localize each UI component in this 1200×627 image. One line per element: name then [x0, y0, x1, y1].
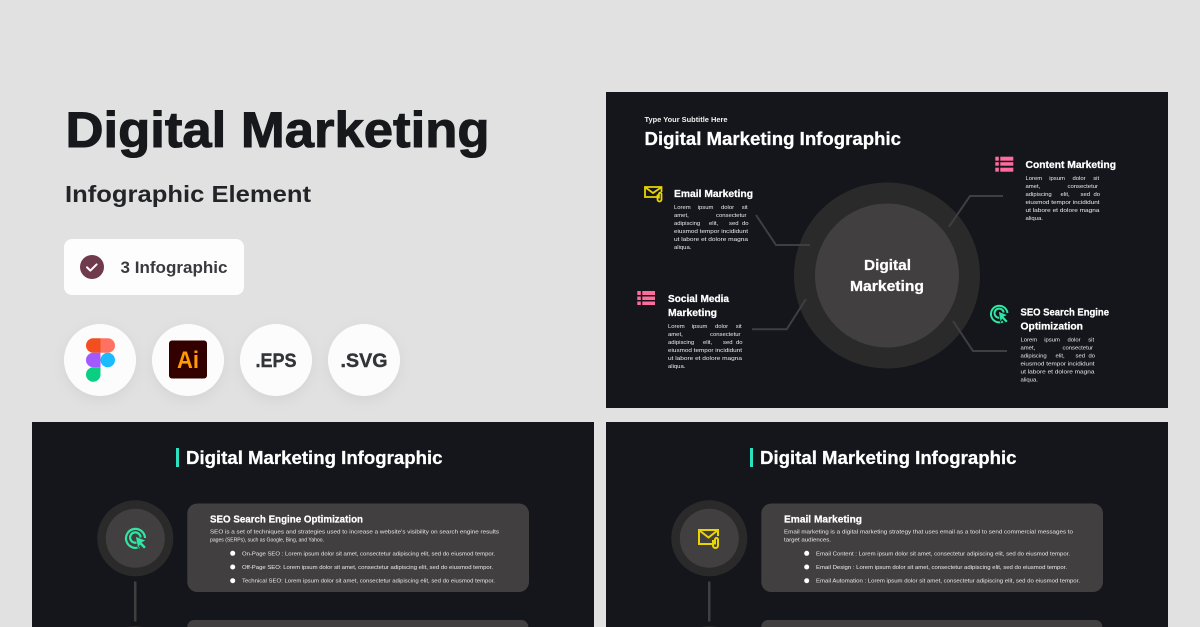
- badge: 3 Infographic: 3 Infographic: [120, 259, 228, 277]
- card: Email: Email Marketing: [784, 514, 862, 526]
- heading with accent bar: Digital Marketing Infographic: [760, 448, 1016, 468]
- card: Email: target audiences.: [784, 538, 831, 544]
- block: Email Marketing: elit,: [709, 221, 719, 227]
- block: SEO Search Engine Optimization: dolor: [1068, 338, 1081, 344]
- connector line: [708, 582, 710, 622]
- block: Content Marketing: dolor: [1072, 176, 1086, 182]
- block: Email Marketing: dolor: [721, 205, 734, 211]
- main title: Digital Marketing: [66, 102, 490, 158]
- block: Social Media Marketing: consectetur: [710, 332, 740, 338]
- icon: email: [645, 187, 662, 202]
- block: Content Marketing: Content Marketing: [1026, 160, 1116, 171]
- icon: content list: [995, 157, 1013, 172]
- block: Content Marketing: ut labore et dolore magna: [1026, 208, 1100, 214]
- block: Social Media Marketing: Social Media: [668, 294, 729, 305]
- central circle: [794, 182, 980, 368]
- block: Content Marketing: sit: [1093, 176, 1099, 182]
- panel: SEO timeline: [32, 422, 594, 627]
- block: SEO Search Engine Optimization: amet,: [1020, 346, 1036, 352]
- block: SEO Search Engine Optimization: elit,: [1056, 354, 1065, 360]
- card: Email: Email Content : Lorem ipsum dolor sit amet, consectetur adipiscing elit, sed do eiusmod tempor.: [816, 551, 1070, 557]
- block: Email Marketing: [674, 189, 753, 251]
- card: SEO: SEO is a set of techniques and strategies used to increase a website's visibility on search engine results: [210, 530, 499, 536]
- icon: email node: [671, 500, 747, 576]
- block: Email Marketing: Email Marketing: [674, 189, 753, 200]
- block: Email Marketing: aliqua.: [674, 245, 692, 251]
- block: SEO Search Engine Optimization: eiusmod tempor incididunt: [1020, 362, 1095, 368]
- card: Email: Email marketing is a digital marketing strategy that uses email as a tool to send commercial messages to: [784, 530, 1074, 536]
- block: Email Marketing: amet,: [674, 213, 689, 219]
- block: SEO Search Engine Optimization: do: [1088, 354, 1096, 360]
- block: Social Media Marketing: Marketing: [668, 308, 717, 319]
- block: Email Marketing: sit: [742, 205, 748, 211]
- card: SEO: pages (SERPs), such as Google, Bing, and Yahoo.: [210, 538, 324, 544]
- connector line: [134, 582, 136, 622]
- central circle: Marketing: [850, 279, 924, 295]
- block: Email Marketing: consectetur: [716, 213, 746, 219]
- block: SEO Search Engine Optimization: SEO Search Engine: [1020, 308, 1109, 318]
- next card (cropped): [187, 620, 528, 627]
- block: Content Marketing: eiusmod tempor incididunt: [1026, 200, 1100, 206]
- icon: Figma: [64, 324, 136, 396]
- next node (cropped): [127, 625, 144, 627]
- next card (cropped): [761, 620, 1102, 627]
- block: Content Marketing: elit,: [1060, 192, 1070, 198]
- connector: SEO: [953, 321, 1007, 351]
- block: Social Media Marketing: [668, 294, 743, 370]
- block: Social Media Marketing: Lorem: [668, 324, 685, 330]
- badge: 3 Infographic: [64, 239, 244, 295]
- card: SEO: Technical SEO: Lorem ipsum dolor sit amet, consectetur adipiscing elit, sed do eiusmod tempor.: [242, 579, 495, 585]
- block: Social Media Marketing: adipiscing: [668, 340, 694, 346]
- block: Content Marketing: consectetur: [1068, 184, 1098, 190]
- block: Email Marketing: ut labore et dolore magna: [674, 237, 749, 243]
- icon: SVG format: .SVG: [340, 350, 388, 372]
- connector: social media: [752, 299, 806, 329]
- heading with accent bar: Digital Marketing Infographic: [186, 448, 442, 468]
- block: SEO Search Engine Optimization: adipiscing: [1020, 354, 1047, 360]
- block: Content Marketing: do: [1094, 192, 1101, 198]
- icon: SEO node: [97, 500, 173, 576]
- block: SEO Search Engine Optimization: sit: [1088, 338, 1094, 344]
- block: SEO Search Engine Optimization: ut labore et dolore magna: [1020, 370, 1095, 376]
- card: SEO: Off-Page SEO: Lorem ipsum dolor sit amet, consectetur adipiscing elit, sed do eiusmod tempor.: [242, 565, 493, 571]
- block: SEO Search Engine Optimization: sed: [1076, 354, 1085, 360]
- connector: content: [949, 196, 1003, 227]
- block: Content Marketing: ipsum: [1049, 176, 1065, 182]
- panel: radial infographic: [606, 92, 1168, 408]
- subtitle: Infographic Element: [65, 181, 311, 207]
- card: SEO: SEO Search Engine Optimization: [210, 514, 363, 526]
- block: Social Media Marketing: dolor: [715, 324, 728, 330]
- block: Content Marketing: sed: [1080, 192, 1090, 198]
- block: Content Marketing: Lorem: [1026, 176, 1042, 182]
- block: Social Media Marketing: ut labore et dolore magna: [668, 356, 743, 362]
- block: Social Media Marketing: ipsum: [692, 324, 708, 330]
- block: Social Media Marketing: elit,: [703, 340, 713, 346]
- panel heading: Digital Marketing Infographic: [644, 129, 901, 149]
- icon: SVG format: [328, 324, 400, 396]
- card: Email: [761, 504, 1103, 592]
- block: Content Marketing: [1026, 160, 1116, 222]
- block: Email Marketing: ipsum: [698, 205, 714, 211]
- next node (cropped): [701, 625, 718, 627]
- block: Social Media Marketing: amet,: [668, 332, 683, 338]
- block: Social Media Marketing: sed: [723, 340, 732, 346]
- card: Email: Email Automation : Lorem ipsum dolor sit amet, consectetur adipiscing elit, sed do eiusmod tempor.: [816, 579, 1080, 585]
- block: Social Media Marketing: do: [736, 340, 743, 346]
- block: SEO Search Engine Optimization: Optimization: [1020, 322, 1083, 332]
- icon: social media list: [637, 291, 655, 305]
- icon: EPS format: [240, 324, 312, 396]
- connector: email: [756, 215, 810, 245]
- icon: EPS format: .EPS: [256, 350, 296, 372]
- card: SEO: On-Page SEO : Lorem ipsum dolor sit amet, consectetur adipiscing elit, sed do eiusmod tempor.: [242, 551, 495, 557]
- block: Content Marketing: adipiscing: [1026, 192, 1052, 198]
- block: Social Media Marketing: aliqua.: [668, 364, 686, 370]
- block: Email Marketing: adipiscing: [674, 221, 700, 227]
- block: SEO Search Engine Optimization: ipsum: [1044, 338, 1060, 344]
- block: Social Media Marketing: eiusmod tempor incididunt: [668, 348, 742, 354]
- icon: Adobe Illustrator: [152, 324, 224, 396]
- block: Content Marketing: aliqua.: [1026, 216, 1043, 222]
- block: Social Media Marketing: sit: [736, 324, 742, 330]
- panel subtitle: Type Your Subtitle Here: [644, 115, 728, 124]
- central circle: Digital: [864, 258, 911, 274]
- icon: SEO target: [991, 306, 1008, 323]
- block: SEO Search Engine Optimization: aliqua.: [1020, 378, 1038, 384]
- block: Email Marketing: Lorem: [674, 205, 691, 211]
- block: SEO Search Engine Optimization: [1020, 308, 1109, 384]
- block: Email Marketing: sed: [729, 221, 738, 227]
- card: Email: Email Design : Lorem ipsum dolor sit amet, consectetur adipiscing elit, sed do eiusmod tempor.: [816, 565, 1067, 571]
- icon: Adobe Illustrator: Ai: [177, 347, 199, 374]
- block: Email Marketing: do: [742, 221, 749, 227]
- card: SEO: [187, 504, 529, 592]
- block: Email Marketing: eiusmod tempor incididunt: [674, 229, 748, 235]
- block: Content Marketing: amet,: [1026, 184, 1041, 190]
- panel: Email timeline: [606, 422, 1168, 627]
- block: SEO Search Engine Optimization: consectetur: [1062, 346, 1093, 352]
- block: SEO Search Engine Optimization: Lorem: [1020, 338, 1037, 344]
